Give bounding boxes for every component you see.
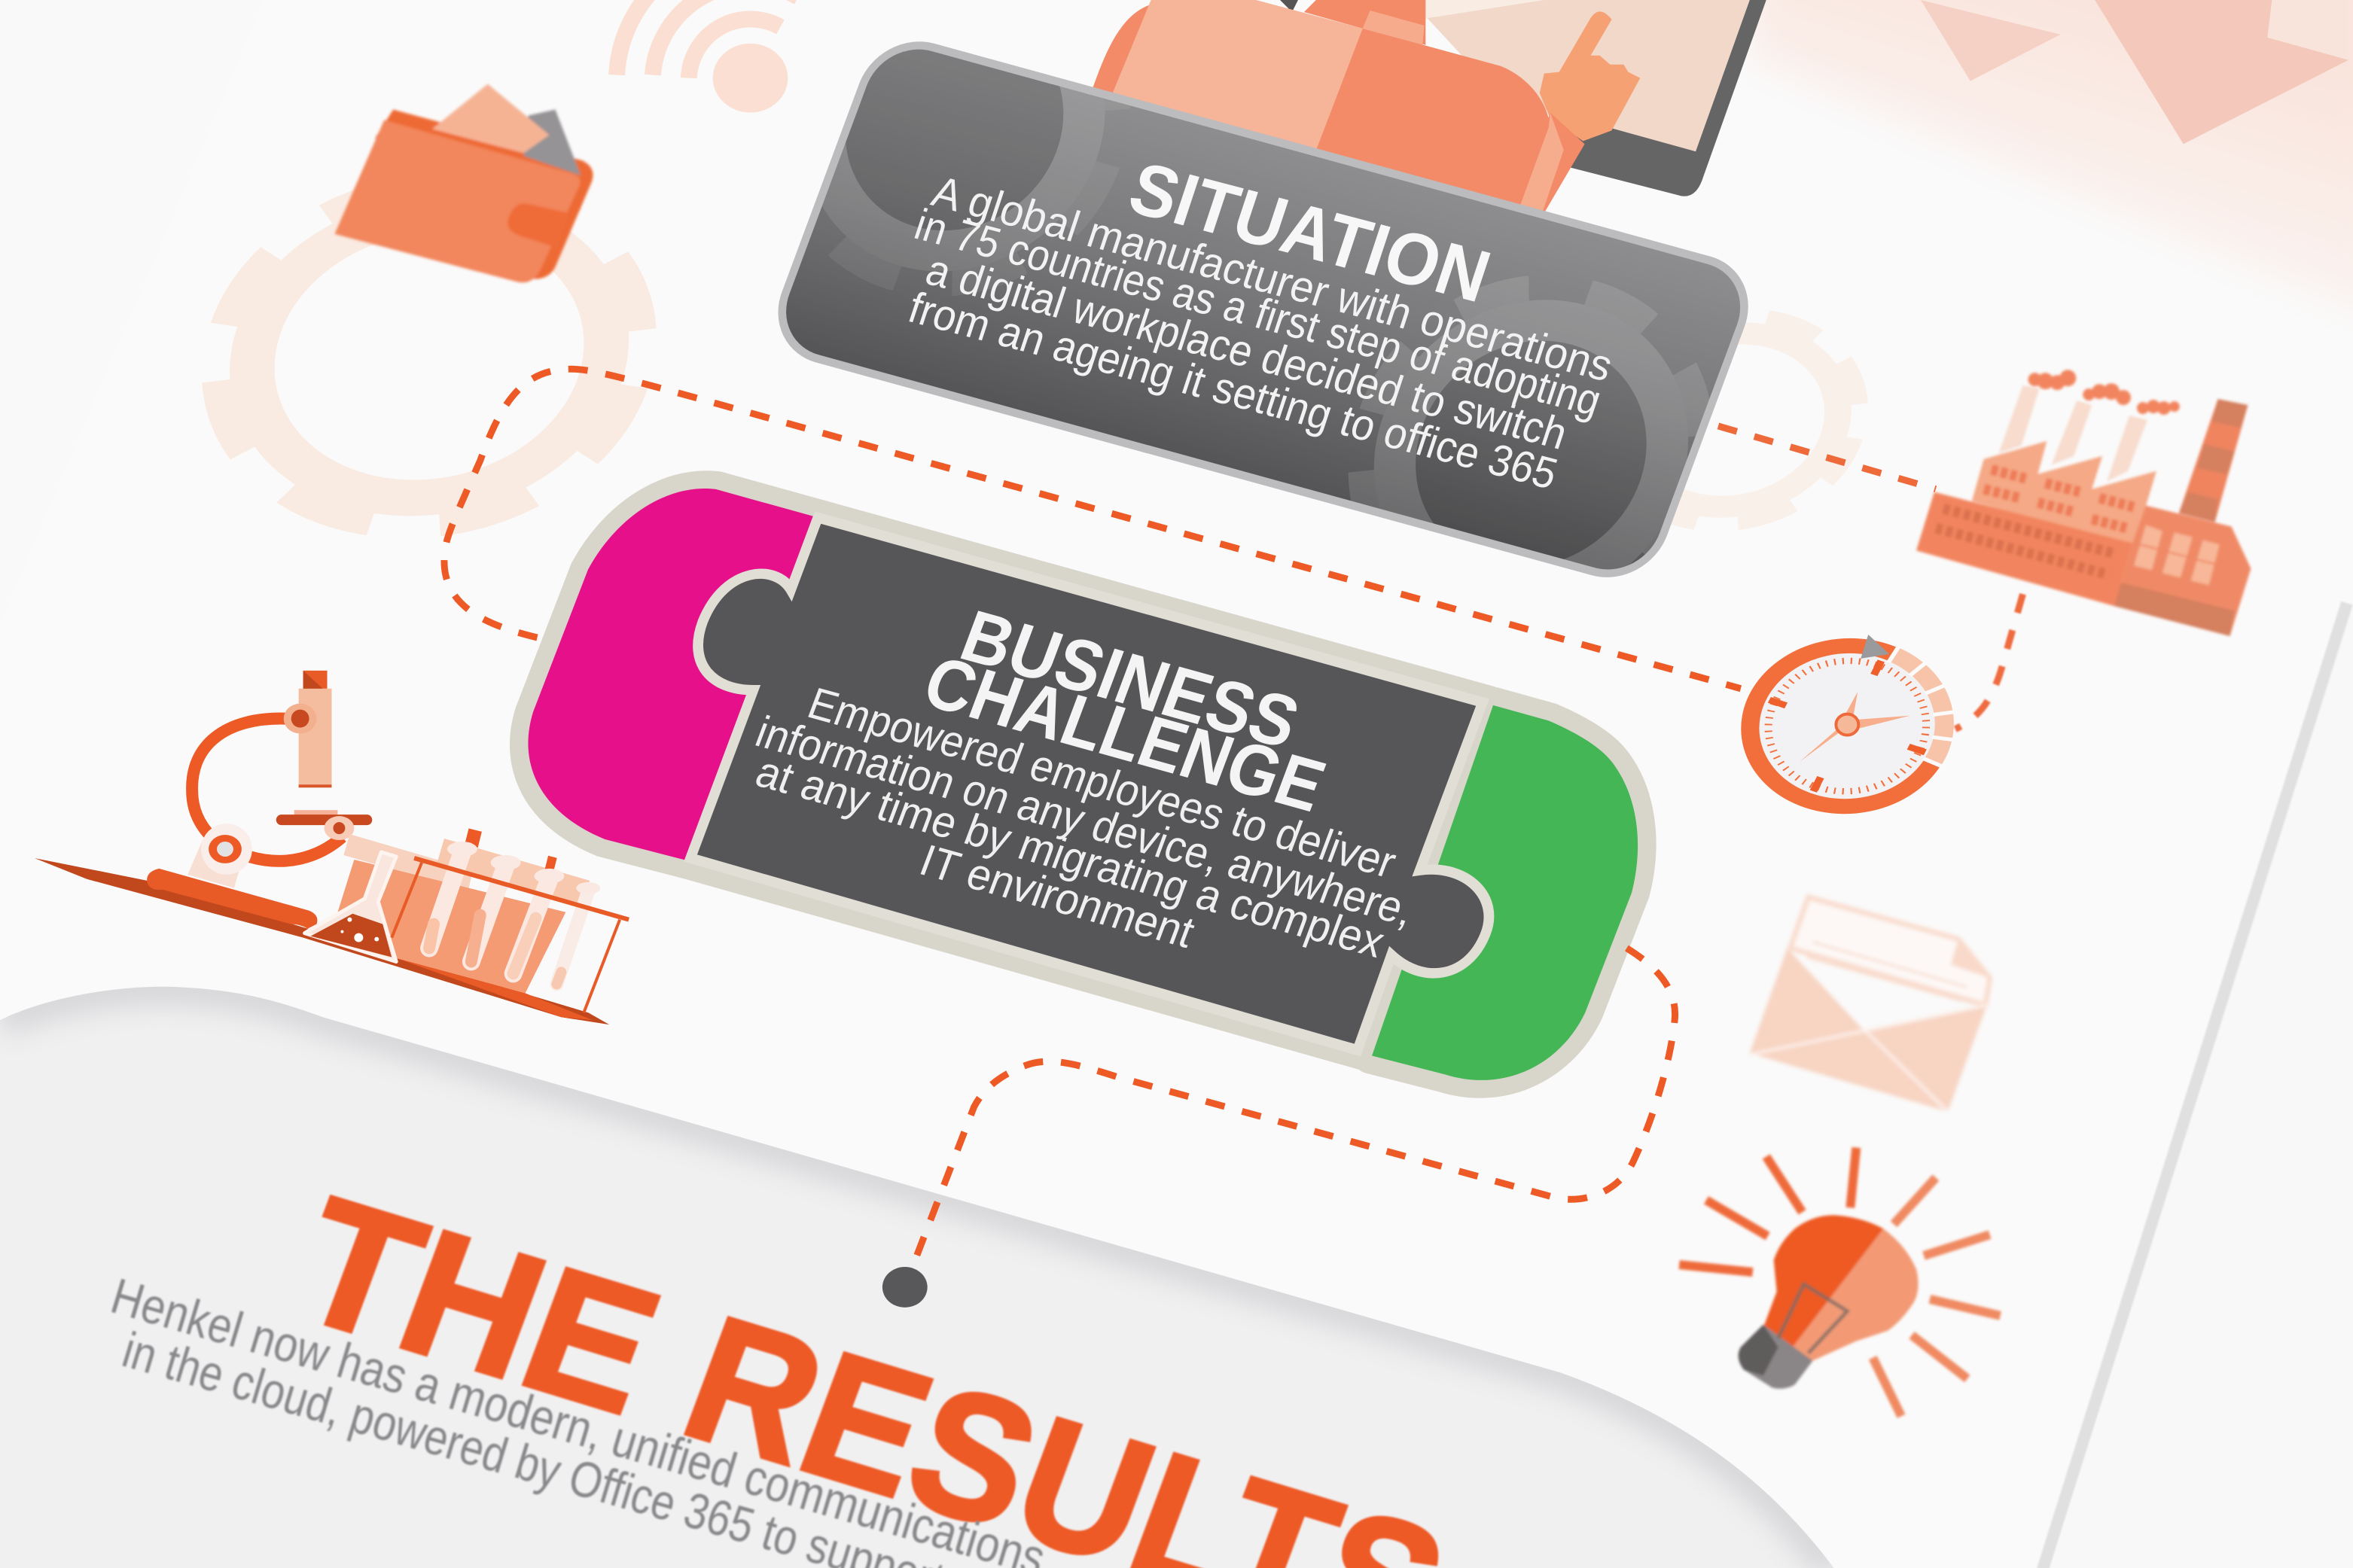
panel: situation <box>779 41 1748 577</box>
icon: microscope and lab equipment <box>35 671 629 1025</box>
green puzzle piece <box>1363 705 1682 1106</box>
top knob <box>284 704 317 734</box>
connector: dashed line clock to pink tab <box>444 369 1741 689</box>
illustration: person with tablet <box>1080 0 1766 255</box>
icon: wallet <box>334 84 593 282</box>
text block: business challenge description: information on any device, anywhere, <box>749 708 1421 936</box>
heading: the results <box>273 1160 1468 1568</box>
text block: situation description: A global manufacturer with operations <box>926 167 1619 391</box>
stand <box>187 828 248 888</box>
text block: business challenge description <box>721 668 1436 1011</box>
grey centre puzzle piece <box>619 498 1564 1071</box>
icon: right gear <box>1574 300 1890 540</box>
icon: wifi <box>617 0 816 112</box>
icon: factory <box>1916 370 2251 636</box>
heading: business challenge: CHALLENGE <box>913 641 1335 827</box>
heading: situation: SITUATION <box>1120 147 1500 318</box>
text block: situation description: from an ageing it setting to office 365 <box>903 283 1563 499</box>
connector: dashed line green tab to end dot <box>914 948 1675 1263</box>
rack frame <box>392 858 629 1012</box>
stage <box>294 810 337 816</box>
text block: situation description: a digital workplace decided to switch <box>920 245 1573 459</box>
rack <box>343 834 473 891</box>
connector: dashed line factory to situation <box>1718 426 1936 489</box>
test tubes <box>429 852 588 984</box>
heading: the results: THE <box>273 1160 682 1451</box>
heading: business challenge: BUSINESS <box>950 595 1309 764</box>
connector: dashed line factory to clock <box>1955 594 2023 729</box>
text block: situation description <box>883 166 1619 504</box>
text block: business challenge description: Empowered employees to deliver <box>801 679 1403 888</box>
pink haze background shapes <box>1750 0 2353 322</box>
icon: clock <box>1705 612 1989 841</box>
pivot <box>201 824 252 875</box>
pink puzzle piece <box>497 464 818 863</box>
panel: business challenge puzzle <box>495 464 1682 1106</box>
base bar <box>147 869 317 929</box>
icon: envelope <box>1750 897 1990 1112</box>
text block: business challenge description: IT environment <box>913 836 1201 958</box>
icon: left gear <box>166 157 693 554</box>
end dot <box>882 1267 928 1308</box>
icon: light bulb <box>1679 1148 2001 1416</box>
text block: situation description: in 75 countries as a first step of adopting <box>909 200 1607 425</box>
microscope tube <box>299 689 331 786</box>
panel: the results <box>0 987 1833 1568</box>
flask <box>305 852 396 961</box>
text block: business challenge description: at any time by migrating a complex <box>749 747 1391 967</box>
microscope arm <box>192 719 285 837</box>
tray <box>35 858 609 1025</box>
